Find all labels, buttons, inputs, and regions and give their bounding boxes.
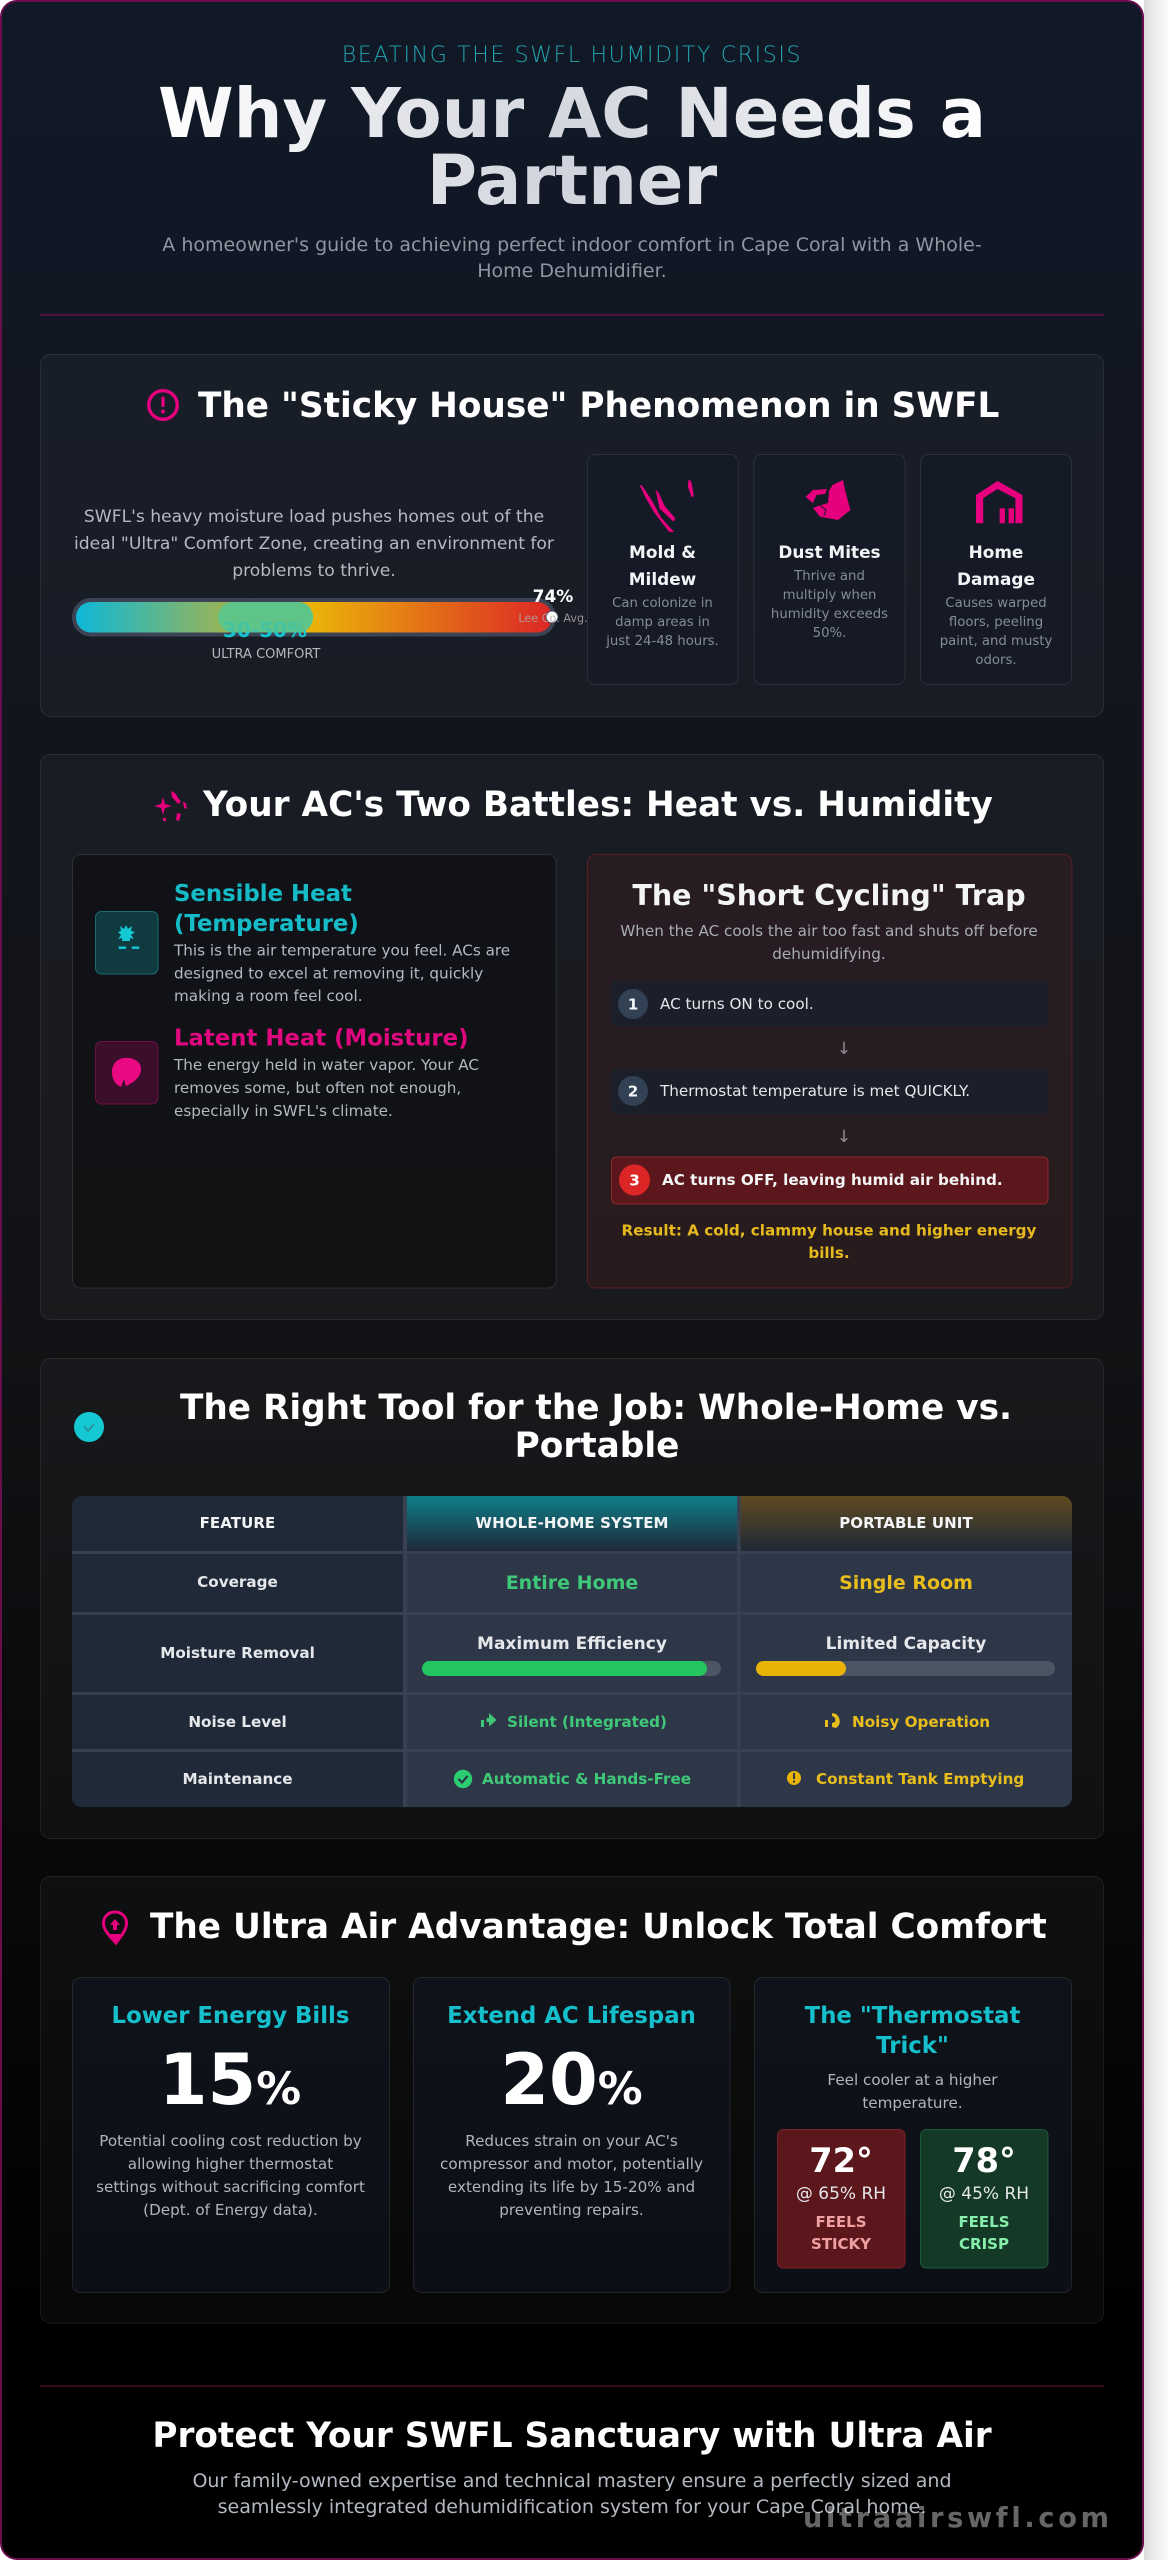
bar: portable capacity bbox=[756, 1661, 1055, 1676]
subtitle: A homeowner's guide to achieving perfect indoor comfort in Cape Coral with a Whole- bbox=[162, 234, 982, 256]
header row bbox=[200, 1514, 973, 1532]
card: mold and mildew: just 24-48 hours. bbox=[605, 634, 719, 649]
card: dust mites: humidity exceeds bbox=[771, 607, 888, 622]
intro text: ideal "Ultra" Comfort Zone, creating an environment for bbox=[74, 534, 555, 554]
sensible heat text bbox=[173, 881, 510, 1005]
latent heat text: removes some, but often not enough, bbox=[174, 1079, 461, 1097]
subtitle: Home Dehumidifier. bbox=[477, 260, 667, 282]
icon: quiet speaker bbox=[481, 1713, 496, 1727]
box: 72 degrees sticky: 72° bbox=[809, 2141, 873, 2180]
sensible heat text: Sensible Heat bbox=[174, 881, 352, 907]
row: maintenance: Maintenance bbox=[182, 1770, 293, 1788]
row: moisture removal bbox=[160, 1634, 1055, 1676]
card: lower energy bills: allowing higher thermostat bbox=[128, 2155, 333, 2173]
card: dust mites: multiply when bbox=[783, 588, 876, 603]
card: thermostat trick bbox=[754, 1978, 1072, 2292]
step 1: 1 bbox=[628, 996, 638, 1014]
arrow: ↓ bbox=[837, 1039, 851, 1059]
comparison table bbox=[72, 1496, 1072, 1807]
card: extend ac lifespan: preventing repairs. bbox=[499, 2201, 644, 2219]
footer bbox=[152, 2416, 992, 2518]
ultra comfort zone bbox=[218, 602, 313, 632]
latent heat text: The energy held in water vapor. Your AC bbox=[173, 1056, 479, 1074]
card: lower energy bills: Lower Energy Bills bbox=[112, 2003, 349, 2029]
card: mold and mildew: Can colonize in bbox=[612, 596, 713, 611]
sensible heat text: This is the air temperature you feel. ACs are bbox=[173, 942, 510, 960]
latent heat text bbox=[173, 1026, 479, 1120]
card: lower energy bills: Potential cooling cost reduction by bbox=[99, 2132, 362, 2150]
right panel: short cycling trap bbox=[588, 854, 1072, 1288]
step 1 bbox=[611, 981, 1048, 1026]
header row: PORTABLE UNIT bbox=[839, 1514, 973, 1532]
box: 78 degrees crisp bbox=[920, 2130, 1048, 2268]
card: thermostat trick: The "Thermostat bbox=[805, 2003, 1020, 2029]
panel: ultra air advantage bbox=[40, 1876, 1104, 2323]
stat: 15% bbox=[159, 2039, 301, 2121]
icon: latent heat droplet bbox=[96, 1042, 158, 1104]
card: home damage: paint, and musty bbox=[940, 634, 1052, 649]
eyebrow: BEATING THE SWFL HUMIDITY CRISIS bbox=[342, 43, 802, 68]
row: noise level: Noise Level bbox=[188, 1713, 287, 1731]
heading: The Ultra Air Advantage: Unlock Total Comfort bbox=[150, 1907, 1047, 1947]
icon: sparkles bbox=[154, 791, 187, 821]
card: thermostat trick: Feel cooler at a higher bbox=[827, 2071, 998, 2089]
card: extend ac lifespan: extending its life by 15-20% and bbox=[448, 2178, 695, 2196]
title: Partner bbox=[427, 141, 717, 221]
row: maintenance bbox=[182, 1770, 1024, 1788]
card: mold and mildew bbox=[588, 454, 738, 684]
result: Result: A cold, clammy house and higher energy bbox=[622, 1222, 1037, 1240]
row: coverage: Coverage bbox=[197, 1573, 278, 1591]
step 1: AC turns ON to cool. bbox=[660, 995, 814, 1013]
box: 72 degrees sticky: @ 65% RH bbox=[796, 2184, 886, 2204]
intro text: SWFL's heavy moisture load pushes homes out of the bbox=[84, 507, 544, 527]
row: noise level bbox=[188, 1713, 990, 1731]
title: The "Short Cycling" Trap bbox=[632, 879, 1026, 912]
icon: loud speaker bbox=[825, 1713, 840, 1728]
heading: The Right Tool for the Job: Whole-Home vs. bbox=[180, 1388, 1012, 1428]
card: home damage: floors, peeling bbox=[949, 615, 1043, 630]
icon: green check bbox=[454, 1770, 472, 1788]
step 2 bbox=[611, 1069, 1048, 1114]
card: thermostat trick: temperature. bbox=[862, 2094, 963, 2112]
sensible heat text: making a room feel cool. bbox=[174, 987, 363, 1005]
latent heat text: especially in SWFL's climate. bbox=[174, 1102, 393, 1120]
step 3: AC turns OFF, leaving humid air behind. bbox=[662, 1171, 1003, 1189]
humidity gauge bbox=[72, 587, 588, 662]
icon: alert circle bbox=[149, 391, 177, 419]
row: coverage: Single Room bbox=[839, 1572, 973, 1594]
marker dot bbox=[546, 611, 558, 623]
sensible heat text: designed to excel at removing it, quickly bbox=[174, 964, 483, 982]
row: maintenance: Constant Tank Emptying bbox=[816, 1770, 1024, 1788]
row: moisture removal: Maximum Efficiency bbox=[477, 1634, 667, 1654]
panel: sticky house phenomenon bbox=[40, 354, 1104, 716]
card: extend ac lifespan: Extend AC Lifespan bbox=[447, 2003, 696, 2029]
humidity gauge: Lee Co. Avg. bbox=[518, 612, 588, 625]
card: dust mites bbox=[754, 454, 905, 684]
card: extend ac lifespan: Reduces strain on your AC's bbox=[465, 2132, 678, 2150]
card: mold and mildew: Mildew bbox=[629, 569, 697, 589]
card: dust mites: Dust Mites bbox=[778, 542, 881, 562]
left panel: heat types bbox=[72, 854, 556, 1288]
heading: Your AC's Two Battles: Heat vs. Humidity bbox=[202, 785, 993, 825]
card: lower energy bills: (Dept. of Energy data). bbox=[143, 2201, 318, 2219]
card: lower energy bills bbox=[72, 1978, 390, 2292]
footer title: Protect Your SWFL Sanctuary with Ultra Air bbox=[152, 2416, 992, 2456]
card: dust mites: 50%. bbox=[813, 626, 846, 641]
latent heat text: Latent Heat (Moisture) bbox=[174, 1026, 468, 1052]
step 2: Thermostat temperature is met QUICKLY. bbox=[659, 1082, 970, 1100]
row: coverage bbox=[197, 1572, 973, 1594]
header bbox=[158, 43, 986, 282]
stat: 20% bbox=[500, 2039, 643, 2121]
card: home damage: Home bbox=[969, 542, 1023, 562]
bar: whole-home efficiency bbox=[422, 1661, 721, 1676]
icon: mold bbox=[640, 479, 694, 532]
card: mold and mildew: damp areas in bbox=[615, 615, 710, 630]
arrow: ↓ bbox=[837, 1127, 851, 1147]
row: moisture removal: Moisture Removal bbox=[160, 1644, 315, 1662]
step 3 bbox=[612, 1157, 1048, 1204]
card: thermostat trick: Trick" bbox=[876, 2033, 949, 2059]
step 3: 3 bbox=[629, 1172, 640, 1190]
card: lower energy bills: settings without sacrificing comfort bbox=[96, 2178, 365, 2196]
footer text: Our family-owned expertise and technical mastery ensure a perfectly sized and bbox=[192, 2470, 952, 2492]
box: 78 degrees crisp: CRISP bbox=[959, 2235, 1009, 2253]
watermark: ultraairswfl.com bbox=[803, 2503, 1113, 2534]
icon: sensible heat bbox=[96, 912, 158, 974]
heading: The "Sticky House" Phenomenon in SWFL bbox=[198, 386, 999, 426]
title: Why Your AC Needs a bbox=[158, 74, 986, 154]
row: moisture removal: Limited Capacity bbox=[826, 1634, 986, 1654]
header row: WHOLE-HOME SYSTEM bbox=[475, 1514, 669, 1532]
box: 72 degrees sticky bbox=[778, 2130, 905, 2268]
footer text: seamlessly integrated dehumidification system for your Cape Coral home. bbox=[218, 2496, 926, 2518]
box: 72 degrees sticky: FEELS bbox=[815, 2213, 867, 2231]
icon: warning bbox=[787, 1771, 801, 1785]
row: noise level: Silent (Integrated) bbox=[507, 1713, 667, 1731]
row: maintenance: Automatic & Hands-Free bbox=[482, 1770, 691, 1788]
card: home damage bbox=[920, 454, 1072, 684]
icon: dust mite bbox=[806, 480, 850, 520]
card: mold and mildew: Mold & bbox=[629, 542, 696, 562]
result: bills. bbox=[808, 1244, 850, 1262]
card: extend ac lifespan bbox=[414, 1978, 730, 2292]
row: noise level: Noisy Operation bbox=[852, 1713, 990, 1731]
box: 72 degrees sticky: STICKY bbox=[811, 2235, 872, 2253]
icon: location pin bbox=[104, 1912, 126, 1943]
sensible heat text: (Temperature) bbox=[174, 911, 359, 937]
heading: Portable bbox=[515, 1426, 679, 1466]
header row: FEATURE bbox=[200, 1514, 275, 1532]
card: home damage: odors. bbox=[975, 653, 1017, 668]
icon: damaged home bbox=[976, 481, 1022, 523]
zone label: 30-50% bbox=[223, 618, 307, 642]
panel: right tool comparison bbox=[40, 1358, 1104, 1838]
card: home damage: Damage bbox=[957, 569, 1035, 589]
row: coverage: Entire Home bbox=[506, 1572, 638, 1594]
box: 78 degrees crisp: @ 45% RH bbox=[939, 2184, 1029, 2204]
step 2: 2 bbox=[628, 1082, 638, 1100]
panel: two battles bbox=[40, 754, 1104, 1320]
intro text: problems to thrive. bbox=[232, 561, 396, 581]
box: 78 degrees crisp: 78° bbox=[952, 2141, 1016, 2180]
humidity gauge: ULTRA COMFORT bbox=[212, 647, 320, 662]
lee county marker label: 74% bbox=[533, 587, 573, 607]
subtitle: When the AC cools the air too fast and shuts off before bbox=[620, 922, 1038, 940]
subtitle: dehumidifying. bbox=[772, 945, 886, 963]
card: extend ac lifespan: compressor and motor, potentially bbox=[440, 2155, 703, 2173]
card: home damage: Causes warped bbox=[945, 596, 1047, 611]
icon: check circle bbox=[74, 1412, 104, 1442]
box: 78 degrees crisp: FEELS bbox=[958, 2213, 1010, 2231]
card: dust mites: Thrive and bbox=[793, 569, 865, 584]
